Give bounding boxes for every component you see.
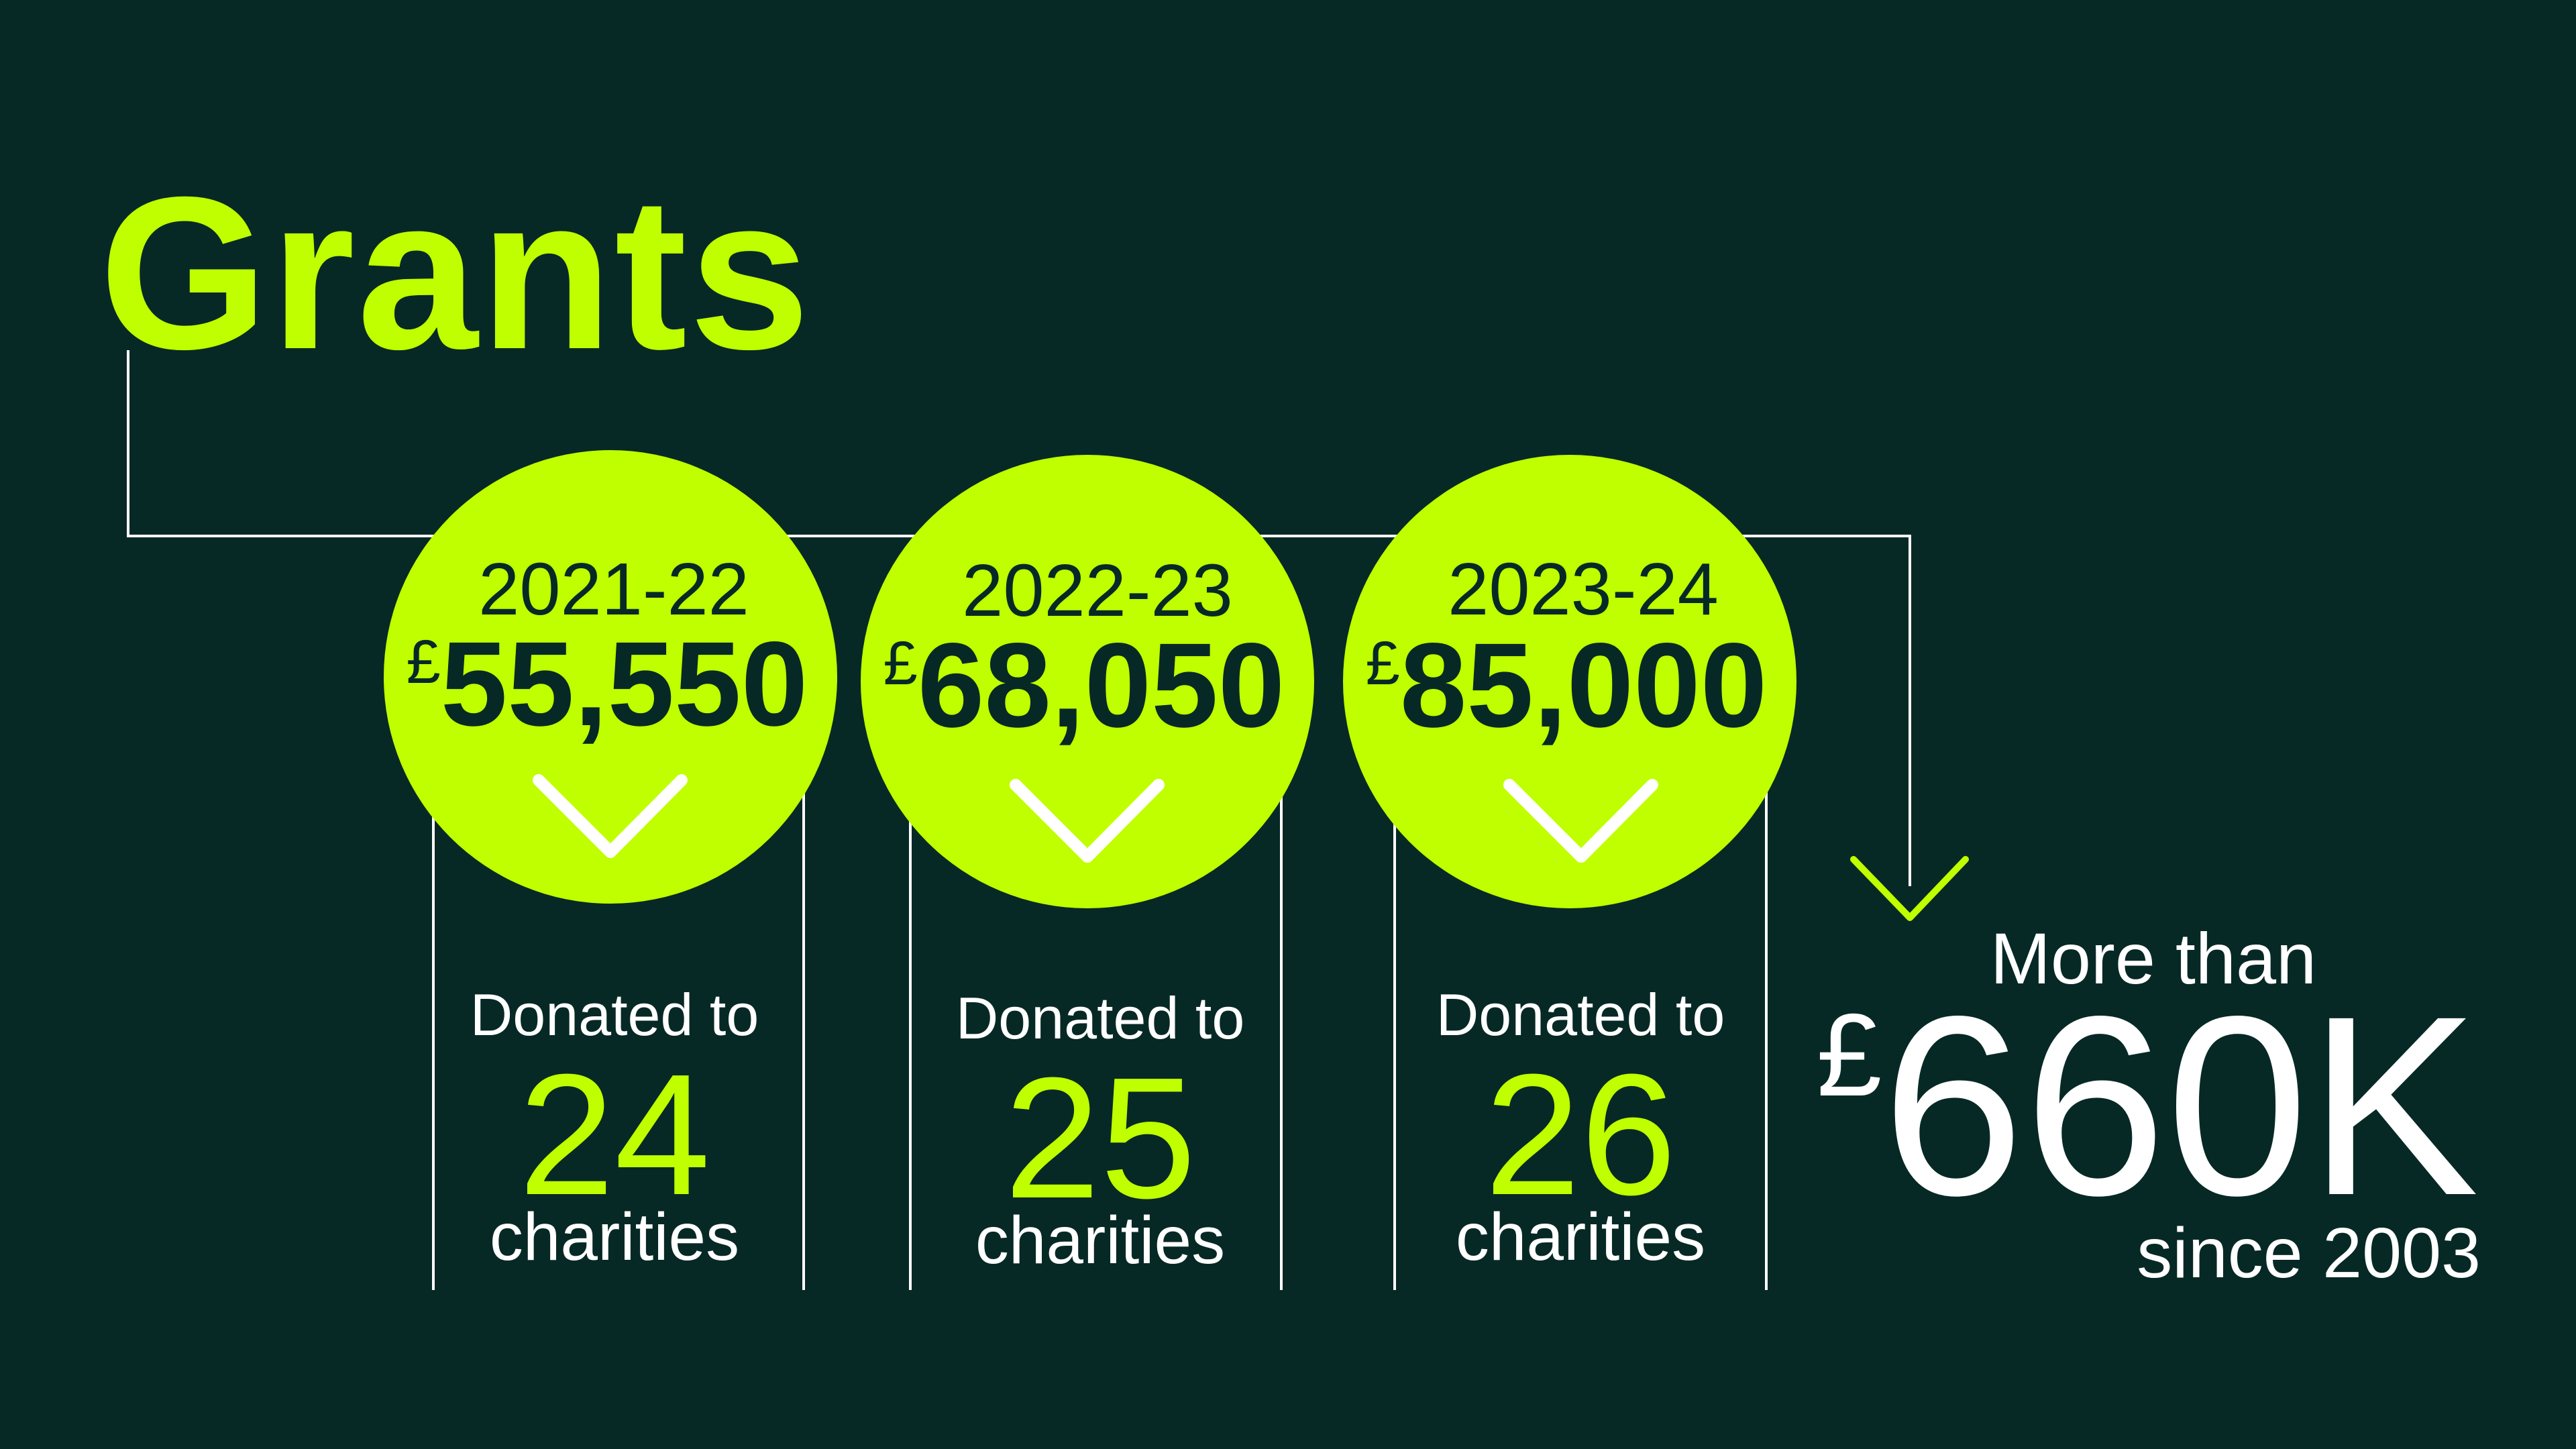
panel: 2021-22: £ <box>407 628 441 696</box>
panel: 2022-23: 68,050 <box>918 618 1285 752</box>
total callout: £ <box>1817 990 1882 1121</box>
panel: 2023-24: Donated to <box>1436 981 1725 1048</box>
total callout <box>1817 918 2481 1293</box>
panel: 2023-24: 85,000 <box>1400 618 1767 752</box>
total callout: More than <box>1990 918 2316 999</box>
total callout: since 2003 <box>2137 1214 2481 1293</box>
panel: 2023-24: £ <box>1366 629 1400 698</box>
panel: 2023-24: 26 <box>1485 1038 1676 1231</box>
panel: 2022-23: charities <box>975 1203 1225 1278</box>
panel: 2021-22: Donated to <box>470 981 759 1048</box>
panel: 2023-24: 2023-24 <box>1448 548 1719 631</box>
panel: 2022-23: 25 <box>1004 1042 1196 1234</box>
panel: 2022-23: 2022-23 <box>962 549 1233 632</box>
panel: 2021-22 <box>384 450 837 1290</box>
panel: 2022-23 <box>861 455 1314 1290</box>
total callout: 660K <box>1882 963 2479 1248</box>
title: Grants <box>99 152 812 394</box>
panel: 2022-23: Donated to <box>956 985 1244 1051</box>
panel: 2023-24 <box>1343 455 1796 1290</box>
panel: 2021-22: charities <box>490 1199 739 1275</box>
panel: 2021-22: 55,550 <box>441 616 808 751</box>
panel: 2022-23: £ <box>883 629 918 698</box>
panel: 2023-24: charities <box>1456 1199 1705 1275</box>
panel: 2021-22: 24 <box>519 1038 710 1231</box>
connector line with arrow <box>128 350 1966 918</box>
panel: 2021-22: 2021-22 <box>478 548 749 631</box>
